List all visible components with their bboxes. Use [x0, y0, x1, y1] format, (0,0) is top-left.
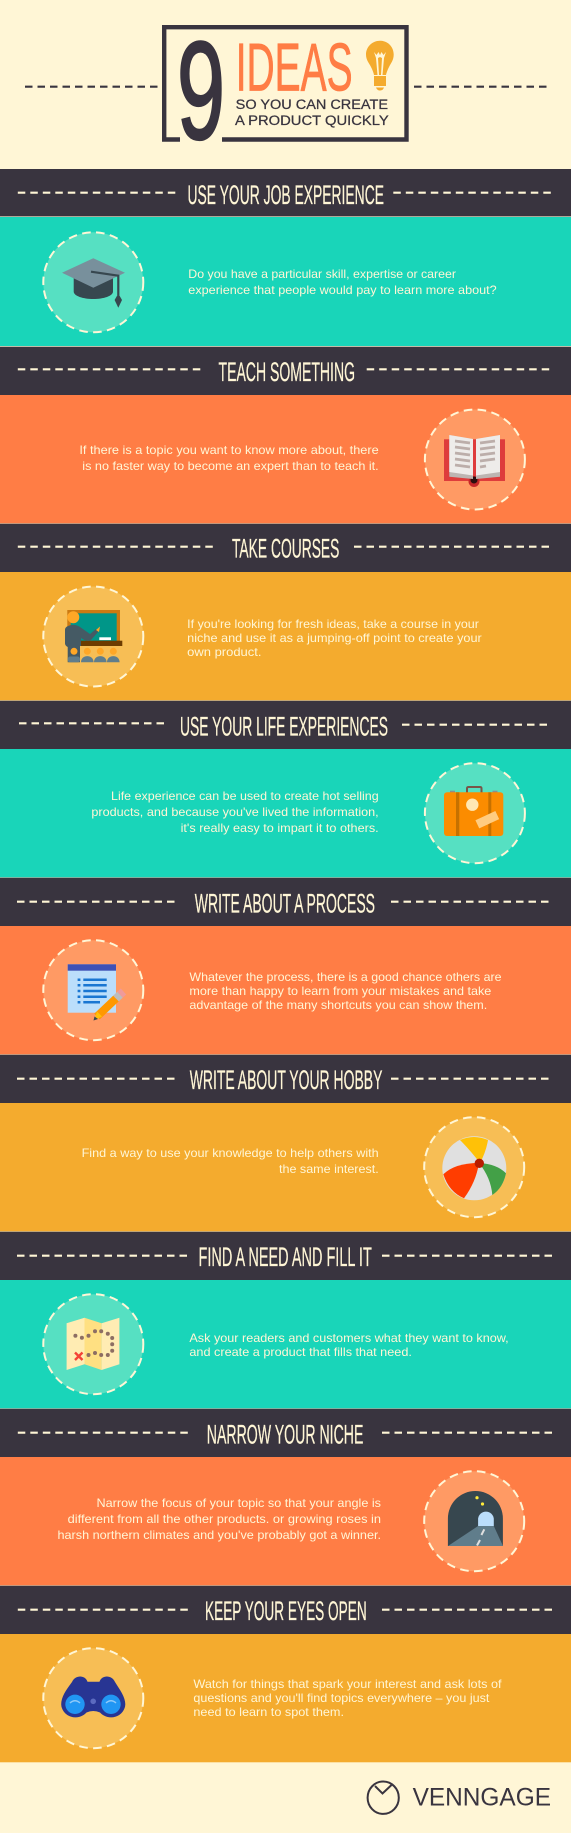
right dashes [402, 724, 547, 726]
text block [187, 617, 482, 659]
heading: NARROW YOUR NICHE [207, 1419, 363, 1449]
left dashes [17, 901, 175, 903]
title frame [164, 27, 406, 140]
icon: teacher at blackboard [65, 610, 122, 662]
heading band [0, 347, 571, 395]
right dashes [393, 192, 551, 194]
text block: Whatever the process, there is a good chance others are [189, 970, 502, 984]
text block: niche and use it as a jumping-off point to create your [187, 631, 482, 645]
right dashes [391, 1078, 549, 1080]
left dashes [18, 1432, 188, 1434]
icon circle [43, 232, 143, 332]
heading: FIND A NEED AND FILL IT [198, 1242, 372, 1272]
section 7: find a need and fill it [0, 1232, 571, 1408]
right dashes [367, 368, 550, 370]
text block [189, 970, 502, 1012]
heading band [0, 1232, 571, 1280]
right dashes [382, 1432, 552, 1434]
section 8: narrow your niche [0, 1409, 571, 1585]
text block: is no faster way to become an expert than to teach it. [82, 459, 379, 473]
text block: different from all the other products. or growing roses in [68, 1512, 381, 1526]
text block [188, 267, 497, 297]
panel [0, 926, 571, 1054]
right dashes [382, 1255, 552, 1257]
text block: products, and because you've lived the information, [91, 805, 379, 819]
icon: graduation cap [62, 258, 125, 308]
left header dashes [25, 86, 158, 88]
text block: own product. [187, 645, 262, 659]
heading: WRITE ABOUT A PROCESS [195, 889, 375, 919]
panel [0, 1103, 571, 1231]
icon: venngage mark [368, 1782, 399, 1814]
text block: experience that people would pay to learn more about? [188, 283, 497, 297]
panel [0, 395, 571, 523]
left dashes [18, 368, 201, 370]
heading band [0, 1409, 571, 1457]
left dashes [17, 1078, 175, 1080]
icon circle [424, 1471, 524, 1571]
heading band [0, 1586, 571, 1634]
text block: and create a product that fills that need. [189, 1345, 412, 1359]
text block: Find a way to use your knowledge to help others with [82, 1146, 379, 1160]
heading band [0, 701, 571, 749]
left dashes [17, 1255, 188, 1257]
subtitle: SO YOU CAN CREATE [236, 97, 388, 112]
icon: road tunnel [448, 1491, 503, 1546]
footer logo [368, 1782, 551, 1814]
header [25, 14, 547, 168]
big number 9: 9 [177, 14, 225, 168]
heading: WRITE ABOUT YOUR HOBBY [190, 1065, 383, 1095]
text block: questions and you'll find topics everywhere – you just [193, 1691, 490, 1705]
heading: TEACH SOMETHING [218, 357, 355, 387]
subtitle [235, 97, 389, 128]
heading: USE YOUR JOB EXPERIENCE [188, 180, 384, 210]
subtitle: A PRODUCT QUICKLY [235, 113, 389, 128]
text block [189, 1331, 509, 1359]
panel [0, 217, 571, 346]
panel [0, 749, 571, 877]
section 3: take courses [0, 524, 571, 700]
text block: If there is a topic you want to know more about, there [79, 443, 379, 457]
text block: Do you have a particular skill, expertise or career [188, 267, 456, 281]
right dashes [391, 901, 549, 903]
text block: If you're looking for fresh ideas, take a course in your [187, 617, 479, 631]
icon: binoculars [61, 1677, 125, 1717]
icon circle [43, 586, 143, 686]
heading: ideas: IDEAS [236, 30, 353, 106]
text block: advantage of the many shortcuts you can show them. [189, 998, 487, 1012]
heading band [0, 524, 571, 572]
section 5: write about a process [0, 878, 571, 1054]
heading: USE YOUR LIFE EXPERIENCES [180, 712, 388, 742]
section 6: write about your hobby [0, 1055, 571, 1231]
icon: light bulb [366, 41, 394, 90]
text block: Ask your readers and customers what they want to know, [189, 1331, 509, 1345]
heading: TAKE COURSES [232, 534, 339, 564]
icon: open book [444, 435, 505, 487]
icon circle [43, 940, 143, 1040]
text block [91, 789, 379, 835]
text block: harsh northern climates and you've probably got a winner. [58, 1528, 381, 1542]
right dashes [354, 546, 550, 548]
section 4: use your life experiences [0, 701, 571, 877]
text block: the same interest. [279, 1162, 379, 1176]
panel [0, 1457, 571, 1585]
heading: KEEP YOUR EYES OPEN [205, 1596, 367, 1626]
text block: more than happy to learn from your mistakes and take [189, 984, 492, 998]
text block [82, 1146, 379, 1176]
icon: treasure map [67, 1318, 119, 1370]
section 2: teach something [0, 347, 571, 523]
text block: need to learn to spot them. [193, 1705, 344, 1719]
icon circle [43, 1648, 143, 1748]
text block: Life experience can be used to create hot selling [111, 789, 379, 803]
left dashes [19, 722, 164, 724]
panel [0, 1634, 571, 1762]
text block: it's really easy to impart it to others. [181, 821, 379, 835]
icon circle [425, 410, 525, 510]
left dashes [18, 1609, 188, 1611]
icon: beach ball [442, 1136, 506, 1200]
panel [0, 1280, 571, 1408]
text block [79, 443, 379, 473]
text block: Watch for things that spark your interest and ask lots of [193, 1677, 502, 1691]
section 9: keep your eyes open [0, 1586, 571, 1762]
section 1: use your job experience [0, 169, 571, 346]
right dashes [382, 1609, 552, 1611]
left dashes [18, 192, 176, 194]
text block: Narrow the focus of your topic so that your angle is [96, 1496, 381, 1510]
icon: notepad and pencil [68, 964, 124, 1020]
icon: suitcase [444, 787, 503, 836]
text block [58, 1496, 381, 1542]
heading band [0, 878, 571, 926]
text block [193, 1677, 502, 1719]
icon circle [425, 763, 525, 863]
panel [0, 572, 571, 700]
right header dashes [414, 86, 547, 88]
heading band [0, 169, 571, 216]
heading band [0, 1055, 571, 1103]
icon circle [424, 1117, 524, 1217]
wordmark: VENNGAGE [413, 1784, 551, 1811]
left dashes [18, 546, 214, 548]
icon circle [43, 1294, 143, 1394]
